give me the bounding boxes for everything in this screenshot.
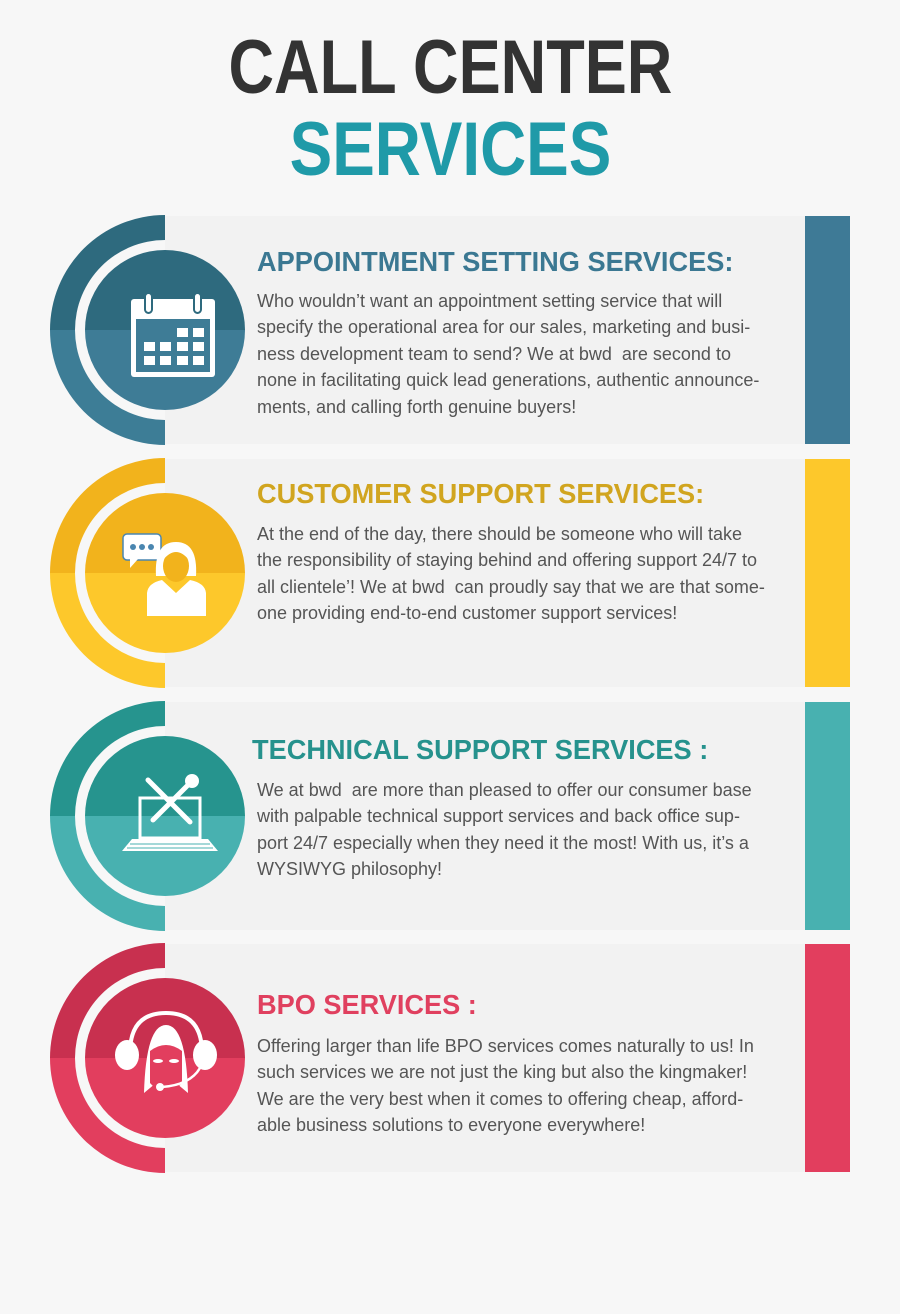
- icon: laptop tools badge: [50, 701, 245, 931]
- icon: calendar badge: [50, 215, 245, 445]
- body text: We at bwd are more than pleased to offer our consumer base: [257, 780, 752, 800]
- panel: customer support: [50, 458, 850, 688]
- body text: specify the operational area for our sales, marketing and busi-: [257, 317, 750, 337]
- body text: [257, 291, 759, 417]
- body text: port 24/7 especially when they need it the most! With us, it’s a: [257, 833, 749, 853]
- title: call center: CALL CENTER: [228, 25, 672, 110]
- heading: BPO SERVICES :: [257, 989, 477, 1020]
- heading: APPOINTMENT SETTING SERVICES:: [257, 246, 733, 277]
- heading: CUSTOMER SUPPORT SERVICES:: [257, 478, 704, 509]
- body text: Who wouldn’t want an appointment setting service that will: [257, 291, 722, 311]
- body text: able business solutions to everyone everywhere!: [257, 1115, 645, 1135]
- panel: bpo: [50, 943, 850, 1173]
- body text: the responsibility of staying behind and offering support 24/7 to: [257, 550, 757, 570]
- body text: such services we are not just the king but also the kingmaker!: [257, 1062, 747, 1082]
- body text: all clientele’! We at bwd can proudly say that we are that some-: [257, 577, 765, 597]
- panel: appointment setting: [50, 215, 850, 445]
- right bar: [805, 216, 850, 444]
- body text: ments, and calling forth genuine buyers!: [257, 397, 576, 417]
- body text: WYSIWYG philosophy!: [257, 859, 442, 879]
- right bar: [805, 702, 850, 930]
- body text: [257, 1036, 754, 1135]
- right bar: [805, 459, 850, 687]
- body text: [257, 780, 752, 879]
- icon: support agent badge: [50, 458, 245, 688]
- panel: technical support: [50, 701, 850, 931]
- body text: one providing end-to-end customer support services!: [257, 603, 677, 623]
- title: services: SERVICES: [289, 107, 611, 192]
- body text: none in facilitating quick lead generations, authentic announce-: [257, 370, 759, 390]
- body text: ness development team to send? We at bwd are second to: [257, 344, 731, 364]
- right bar: [805, 944, 850, 1172]
- body text: with palpable technical support services and back office sup-: [257, 806, 740, 826]
- body text: We are the very best when it comes to offering cheap, afford-: [257, 1089, 743, 1109]
- body text: At the end of the day, there should be someone who will take: [257, 524, 742, 544]
- heading: TECHNICAL SUPPORT SERVICES :: [252, 734, 708, 765]
- body text: Offering larger than life BPO services comes naturally to us! In: [257, 1036, 754, 1056]
- icon: headset agent badge: [50, 943, 245, 1173]
- body text: [257, 524, 765, 623]
